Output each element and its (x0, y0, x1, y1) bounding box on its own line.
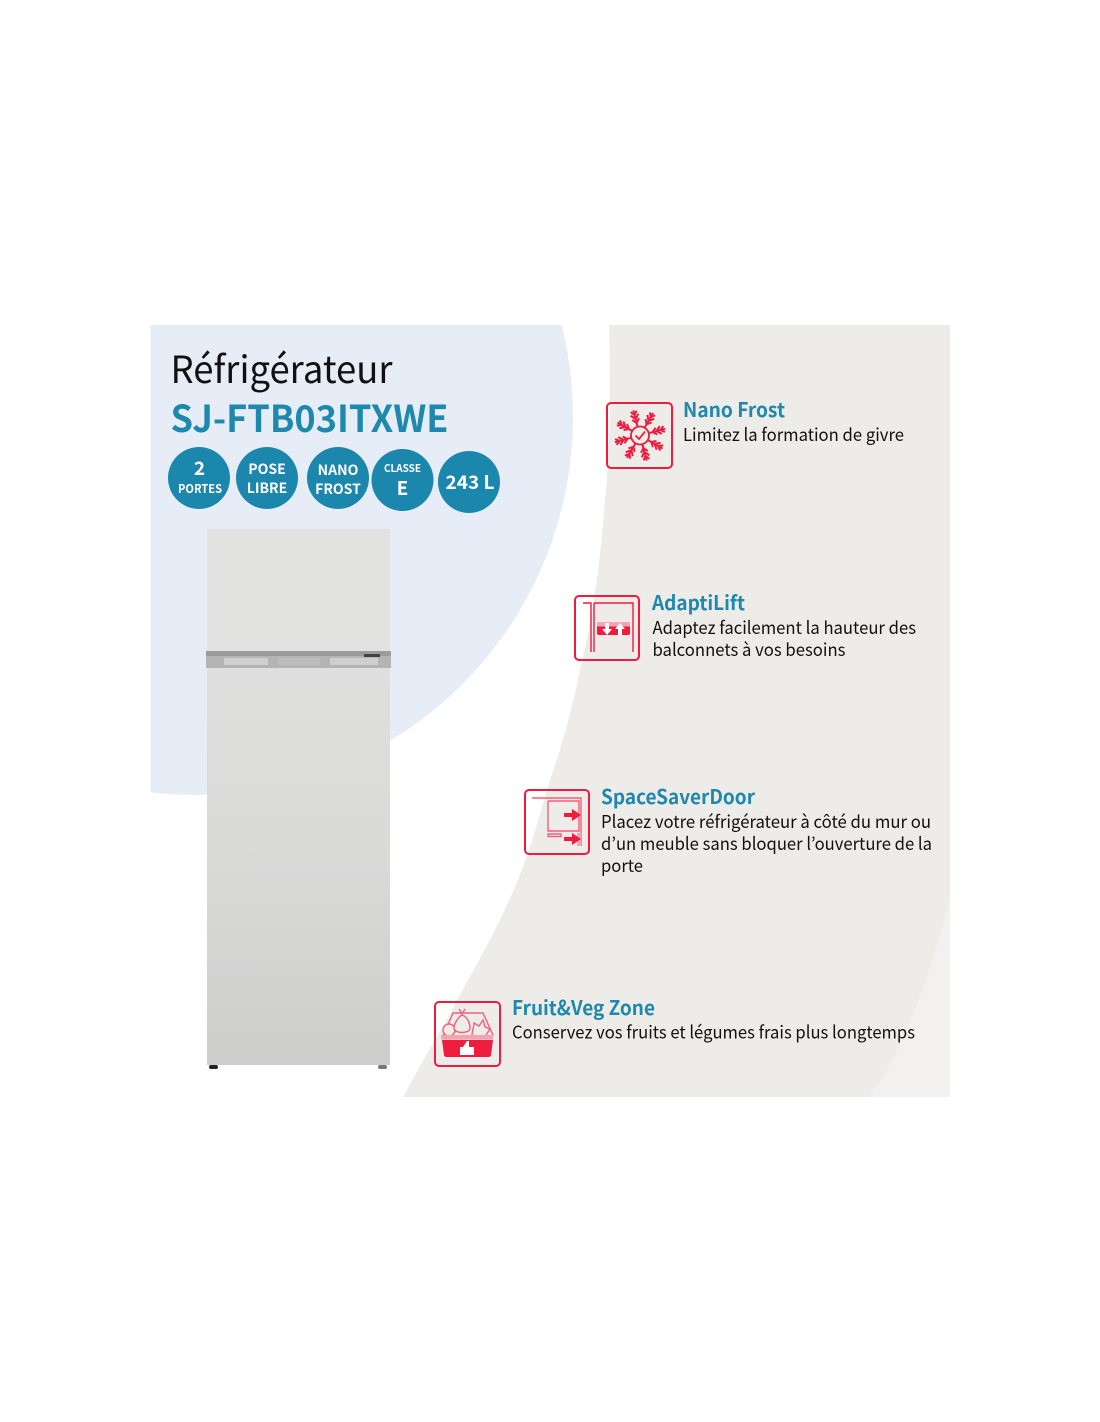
description: Limitez la formation de givre (683, 422, 904, 447)
badge: pose libre: LIBRE (247, 478, 287, 498)
badge: 2 portes: PORTES (178, 480, 222, 497)
background: blue circle (150, 325, 573, 795)
badge: 243 L: 243 L (446, 468, 494, 495)
heading: SpaceSaverDoor (601, 781, 755, 810)
feature: SpaceSaverDoor (525, 781, 932, 878)
background: grey panel (403, 325, 950, 1097)
feature: AdaptiLift (575, 587, 916, 662)
feature: Fruit&Veg Zone (435, 992, 915, 1066)
badge: 2 portes (168, 447, 230, 509)
freezer door (207, 529, 390, 651)
badge: classe E (372, 449, 434, 511)
heading: Fruit&Veg Zone (512, 992, 655, 1021)
badge: nano frost: FROST (315, 479, 361, 499)
badge: 243 L (438, 451, 500, 513)
badge: nano frost (307, 447, 369, 509)
badge: classe E: E (397, 474, 408, 501)
feature: SpaceSaverDoor: porte (601, 853, 643, 878)
badge: 2 portes: 2 (194, 454, 205, 481)
badge: classe E: CLASSE (384, 461, 421, 476)
divider handle (206, 651, 391, 668)
icon: fruit basket (435, 1002, 500, 1066)
title: Réfrigérateur (170, 339, 393, 394)
feature: AdaptiLift: balconnets à vos besoins (652, 637, 846, 662)
fridge door (207, 668, 390, 1065)
feature: Nano Frost (607, 394, 904, 468)
description: Placez votre réfrigérateur à côté du mur ou (601, 809, 931, 834)
description: Conservez vos fruits et légumes frais plus longtemps (512, 1020, 915, 1044)
background: light lower-right patch (868, 900, 950, 1097)
icon: snowflake (607, 403, 672, 468)
icon: adjustable shelf (575, 596, 639, 660)
heading: AdaptiLift (651, 587, 746, 616)
icon: door against wall (525, 790, 589, 854)
feet (209, 1065, 387, 1069)
badge: pose libre: POSE (248, 459, 286, 479)
refrigerator (206, 529, 391, 1069)
heading: Nano Frost (683, 394, 786, 423)
badge: nano frost: NANO (318, 460, 359, 480)
badge: pose libre (236, 447, 298, 509)
description: Adaptez facilement la hauteur des (652, 615, 916, 640)
model name: SJ-FTB03ITXWE (170, 389, 448, 443)
feature: SpaceSaverDoor: d’un meuble sans bloquer l’ouverture de la (601, 831, 932, 856)
